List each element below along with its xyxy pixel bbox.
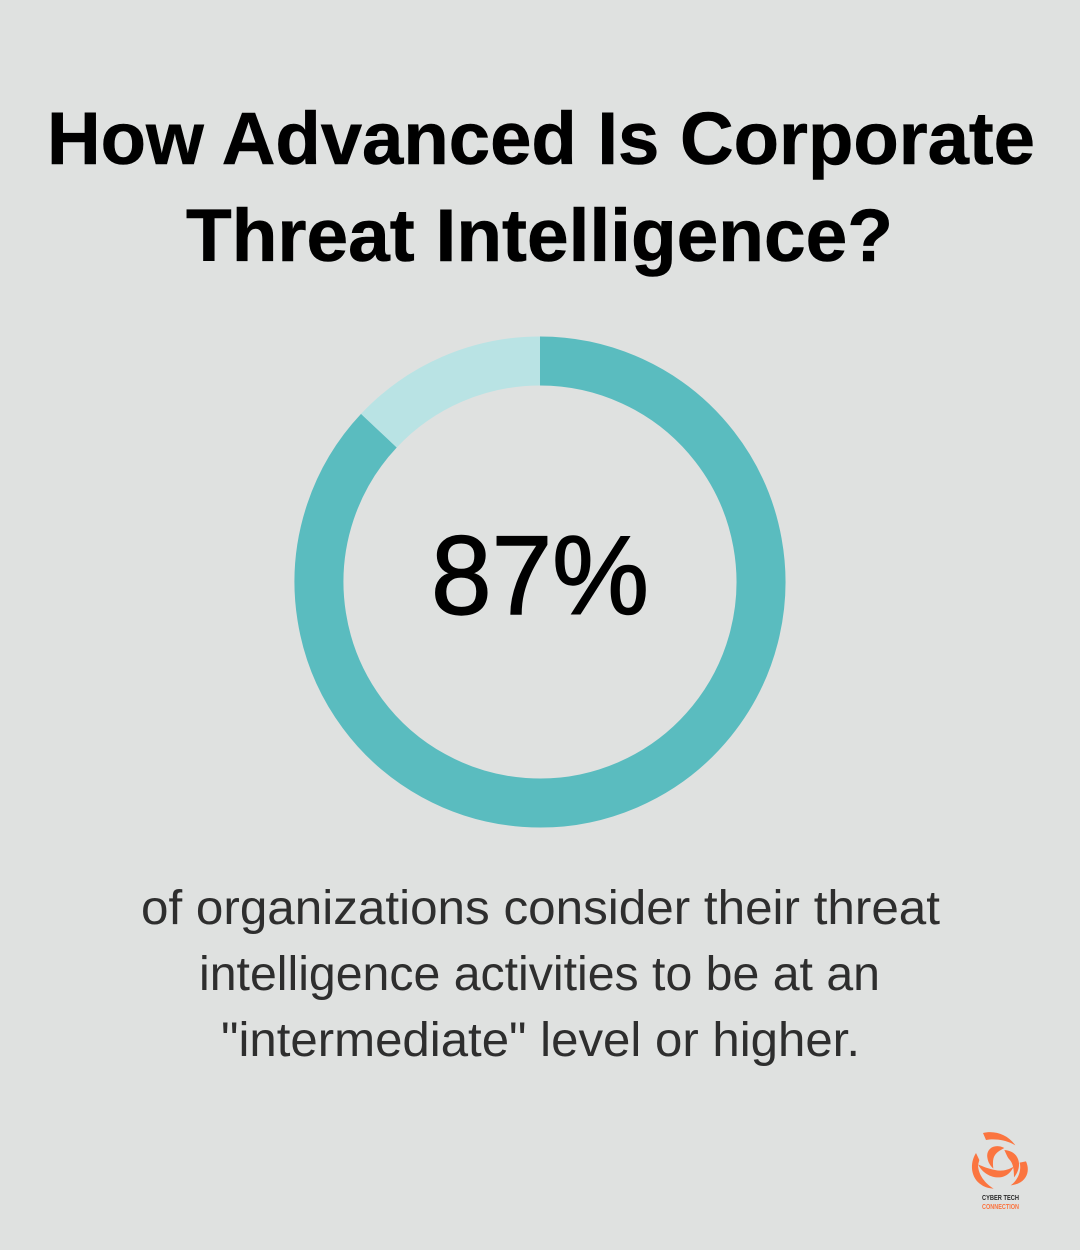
description text (141, 882, 940, 1067)
icon: logo swirl (972, 1132, 1028, 1189)
logo text: CYBER TECH (982, 1193, 1019, 1202)
chart segment: remainder (379, 361, 540, 431)
title: How Advanced Is Corporate (47, 97, 1035, 180)
title: Threat Intelligence? (186, 194, 893, 277)
title (47, 97, 1035, 277)
logo subtext: CONNECTION (982, 1202, 1019, 1211)
donut chart: 87% (319, 361, 761, 803)
description text: of organizations consider their threat (141, 882, 940, 935)
description text: intelligence activities to be at an (199, 948, 880, 1001)
chart segment: 87% (319, 361, 761, 803)
logo: Cyber Tech Connection (972, 1132, 1028, 1211)
description text: "intermediate" level or higher. (221, 1014, 860, 1067)
big number: 87% (431, 513, 649, 638)
